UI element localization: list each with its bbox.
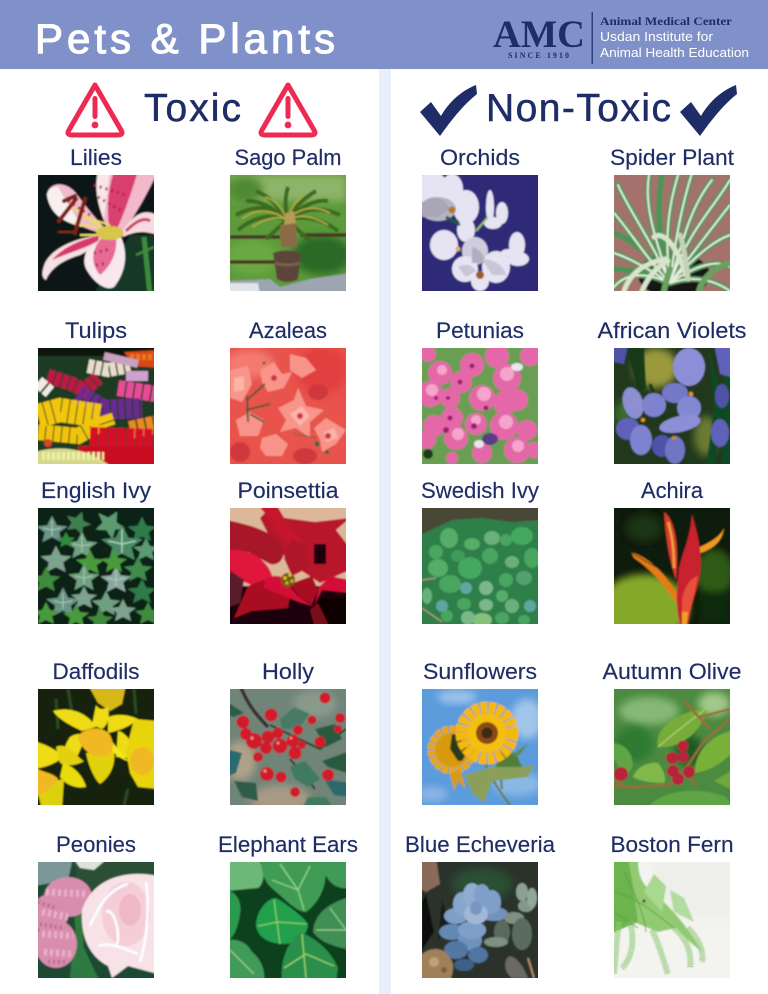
panel: Boston Fern [610, 832, 734, 982]
photo: holly [230, 689, 346, 805]
panel: Tulips: Tulips [65, 318, 127, 343]
photo: orchids [422, 175, 538, 291]
panel: Sunflowers [416, 659, 543, 809]
panel: Achira: Achira [641, 478, 704, 503]
photo: poinsettia [230, 508, 346, 624]
AMC logo: Animal Health Education [600, 45, 749, 60]
panel: Sunflowers: Sunflowers [423, 659, 537, 684]
AMC logo [493, 12, 749, 64]
panel: Autumn Olive: Autumn Olive [602, 659, 742, 684]
photo: elephant ears [230, 862, 346, 978]
panel: Daffodils: Daffodils [52, 659, 140, 684]
panel: Boston Fern: Boston Fern [610, 832, 734, 857]
panel: Holly [224, 659, 350, 813]
photo: lily [38, 175, 154, 291]
panel: Elephant Ears [218, 832, 358, 982]
icon: check mark left [420, 85, 477, 136]
non-toxic heading: Non-Toxic [486, 87, 671, 130]
panel: Daffodils [34, 659, 158, 809]
AMC logo: SINCE 1910 [508, 51, 569, 60]
photo: english ivy [38, 508, 154, 624]
panel: Petunias: Petunias [436, 318, 524, 343]
panel: Achira [599, 478, 734, 642]
panel: English Ivy: English Ivy [41, 478, 151, 503]
photo: spider plant [614, 175, 730, 291]
panel: Swedish Ivy: Swedish Ivy [421, 478, 539, 503]
panel: Peonies: Peonies [56, 832, 136, 857]
photo: peonies [38, 862, 154, 978]
photo: african violets [614, 348, 730, 464]
photo: petunias [422, 348, 538, 464]
panel: Orchids: Orchids [440, 145, 520, 170]
panel: African Violets [598, 318, 746, 468]
photo: azaleas [230, 348, 346, 464]
photo: swedish ivy [422, 508, 538, 624]
panel: Swedish Ivy [418, 478, 542, 628]
photo: sago palm [230, 175, 346, 291]
photo: daffodils [38, 689, 154, 805]
panel: African Violets: African Violets [598, 318, 746, 343]
non-toxic heading [420, 85, 737, 136]
panel: Lilies: Lilies [70, 145, 122, 170]
toxic heading: Toxic [144, 87, 241, 130]
icon: warning triangle left [68, 85, 122, 135]
panel: Orchids [416, 145, 542, 295]
panel: Poinsettia [226, 478, 350, 628]
panel: Peonies [32, 832, 158, 982]
photo: blue echeveria [422, 862, 538, 978]
photo: achira [614, 508, 730, 624]
photo: tulips [38, 348, 154, 464]
AMC logo: Animal Medical Center [600, 14, 733, 28]
toxic heading [68, 85, 315, 135]
photo: autumn olive [614, 689, 730, 805]
panel: Elephant Ears: Elephant Ears [218, 832, 358, 857]
panel: Spider Plant [610, 145, 734, 297]
panel: Sago Palm [226, 145, 352, 295]
icon: warning triangle right [261, 85, 315, 135]
panel: English Ivy [32, 478, 161, 630]
panel: Azaleas [226, 318, 350, 468]
panel: Sago Palm: Sago Palm [234, 145, 342, 170]
title: Pets & Plants [35, 15, 335, 62]
panel: Petunias [417, 318, 542, 468]
panel: Spider Plant: Spider Plant [610, 145, 734, 170]
panel: Azaleas: Azaleas [249, 318, 327, 343]
panel: Blue Echeveria: Blue Echeveria [405, 832, 556, 857]
panel: Holly: Holly [262, 659, 314, 684]
AMC logo: AMC [493, 13, 585, 56]
panel: Autumn Olive [602, 659, 742, 809]
header band [0, 0, 768, 69]
photo: sunflowers [422, 689, 538, 805]
icon: check mark right [680, 85, 737, 136]
AMC logo: Usdan Institute for [600, 29, 714, 44]
panel: Poinsettia: Poinsettia [238, 478, 339, 503]
panel: Tulips [34, 318, 158, 468]
panel: Blue Echeveria [405, 832, 556, 982]
photo: boston fern [614, 862, 730, 978]
panel: Lilies [34, 145, 158, 295]
